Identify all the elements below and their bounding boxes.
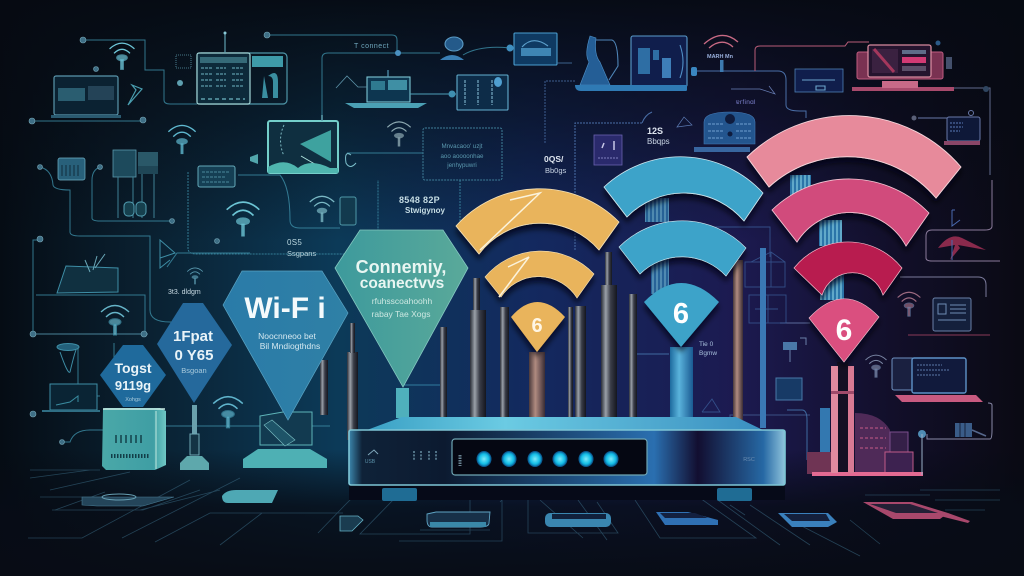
mid info box — [423, 128, 502, 180]
tower columns — [831, 362, 854, 473]
label: speed: Stwigynoy — [405, 206, 446, 215]
icon: branch fan — [938, 210, 986, 260]
router top — [367, 417, 763, 430]
label: 12S: Bbqps — [647, 137, 670, 146]
label: 0QS — [544, 154, 567, 175]
blue fan: 6 — [673, 298, 689, 330]
left mid: chart icon and frames — [42, 240, 243, 428]
mid info box: aoo aoooonhae — [440, 153, 484, 160]
subheading: coanectvvs — [360, 275, 444, 292]
device: small teal pad — [340, 516, 363, 531]
label: tie speed — [699, 341, 717, 357]
icon: wifi top left — [110, 43, 134, 69]
blue arc mid — [619, 221, 746, 276]
wifi signal: pink — [747, 116, 961, 362]
icon: wifi c — [227, 202, 259, 236]
teal monitor — [250, 115, 356, 173]
icon: purple panel — [594, 117, 692, 165]
body: Noocnneoo bet — [258, 331, 316, 341]
icon: wifi e — [187, 268, 203, 284]
teal device box — [102, 408, 166, 470]
icon: cloud device — [395, 37, 514, 60]
unit: Xohgs — [125, 397, 141, 403]
right-side wifi, panels and laptop — [776, 210, 986, 437]
device: router pad — [545, 513, 611, 527]
right laptop small — [912, 110, 980, 145]
label: 12S: 12S — [647, 126, 663, 136]
floor lines — [28, 470, 1000, 556]
mini antenna base — [180, 405, 209, 470]
cluster of wifi icons center-left — [168, 122, 411, 284]
icon: laptop — [51, 76, 142, 118]
icon: wifi rose — [898, 292, 920, 316]
label: 12S — [647, 126, 670, 146]
icon: chart panel — [457, 75, 508, 110]
router feet — [382, 488, 752, 501]
wifi stripes behind arcs — [645, 175, 844, 300]
mid info box: jenhypuwri — [446, 162, 477, 169]
router display with LEDs — [452, 439, 647, 475]
icon: data panel — [176, 32, 287, 104]
label: speed: 8548 82P — [399, 195, 440, 205]
pink tower base — [807, 362, 926, 476]
heading: Wi-F i — [244, 292, 326, 325]
gold fan: 6 — [531, 315, 543, 337]
router logo: RSC — [743, 457, 755, 463]
label: 0QS: 0QS/ — [544, 154, 564, 164]
icon: phone — [340, 197, 356, 225]
router — [349, 417, 785, 501]
label: tie speed: Tie 0 — [699, 341, 714, 348]
top-middle devices — [336, 33, 843, 165]
icon: pink laptop — [892, 358, 983, 402]
diamond: Wi-Fi: Bil Mndiogthdns — [260, 341, 320, 351]
small equipment left — [58, 150, 235, 218]
wifi signal: gold — [456, 189, 619, 352]
pink fan — [809, 299, 879, 362]
gold fan — [511, 302, 565, 352]
device: tablet blue — [656, 512, 718, 525]
icon: wifi d — [310, 196, 334, 222]
icon: wifi blue small — [783, 338, 806, 362]
tower buildings — [807, 408, 926, 476]
floor devices — [82, 490, 970, 531]
value: 9119g — [115, 378, 151, 393]
device: right phone — [778, 513, 837, 527]
pink arc outer — [747, 116, 961, 198]
icon: wifi violet: MARH Mn — [707, 54, 734, 60]
connector node dots — [29, 32, 270, 444]
unit: Bsgoan — [181, 366, 207, 375]
blue fan — [644, 283, 719, 347]
heading: Connemiy, — [356, 257, 446, 277]
label: 0S5 — [287, 238, 316, 258]
label: speed — [399, 195, 446, 215]
label: 3t3: 3t3. dldgm — [168, 289, 201, 296]
body: rfuhsscoahoohh — [372, 296, 433, 306]
pink arc mid — [772, 179, 929, 246]
icon: book device — [694, 112, 755, 152]
label: 0S5: Ssgpans — [287, 249, 316, 258]
label: connect: T connect — [354, 43, 389, 50]
pink monitor top right — [852, 40, 989, 92]
diamond: Wi-Fi — [223, 271, 348, 420]
glass laptop device — [243, 412, 327, 468]
label: erfinal: ɐrfinɑl — [736, 99, 756, 106]
heading: Togst — [114, 360, 152, 376]
mid info box text: Mnvacaoo' uzjt — [441, 143, 483, 150]
icon: small chart box — [795, 69, 843, 92]
gold arc mid — [485, 251, 594, 298]
diamond: teal connectivity — [335, 230, 468, 387]
icon: dashboard panel — [933, 298, 971, 331]
top-left device icons — [51, 32, 287, 118]
label: tie speed: Bgmw — [699, 350, 717, 357]
router shadow — [349, 484, 785, 500]
router logo: USB — [365, 459, 376, 465]
value: 0 Y65 — [175, 347, 213, 364]
diamond: teal connectivity: rabay Tae Xogs — [372, 309, 430, 319]
icon: figure device — [575, 36, 697, 91]
device: pink tablet — [863, 502, 970, 523]
right circuit lines — [545, 42, 1000, 460]
icon: device right — [955, 423, 986, 437]
pink fan: 6 — [836, 314, 852, 347]
icon: top-right mini screen — [514, 33, 572, 65]
diamond: 1Fpat — [157, 303, 232, 403]
icon: wifi violet — [704, 35, 738, 72]
wifi signal: blue — [604, 157, 763, 347]
icon: wifi a — [168, 125, 196, 154]
pink arc inner — [794, 242, 902, 295]
label: 0S5: 0S5 — [287, 238, 302, 247]
router front — [349, 430, 785, 485]
icon: small laptop — [336, 70, 456, 108]
router logo — [365, 450, 755, 465]
gold arc outer — [456, 189, 619, 254]
icon: wifi indigo — [866, 355, 886, 377]
antenna poles — [320, 248, 766, 440]
device: teal tablet — [222, 490, 278, 503]
panel: blue note — [776, 378, 802, 400]
heading: 1Fpat — [173, 328, 213, 345]
label: 0QS: Bb0gs — [545, 166, 567, 175]
circuit connector lines — [32, 35, 510, 442]
diamond: Togst — [100, 345, 166, 407]
blue arc outer — [604, 157, 763, 221]
blue line-art building center — [702, 227, 786, 412]
icon: wifi b — [387, 122, 411, 146]
device: slate — [427, 512, 490, 527]
status LEDs — [477, 452, 618, 466]
device: left tablet — [82, 494, 174, 506]
